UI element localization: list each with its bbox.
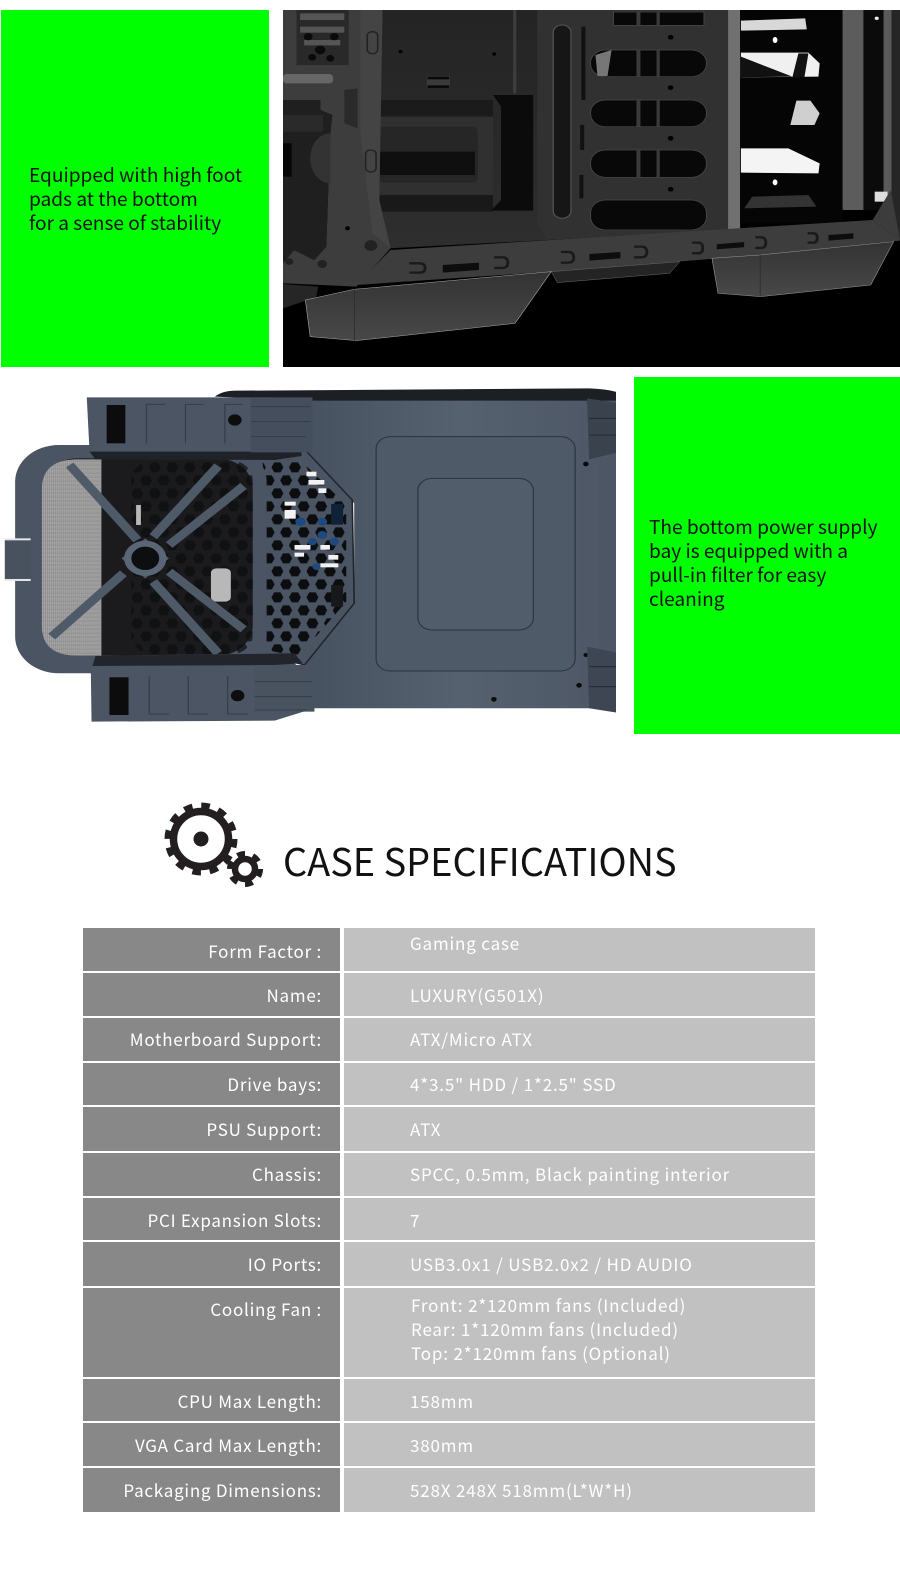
lit section on right xyxy=(728,10,740,230)
row: form factor xyxy=(83,928,815,971)
left plate and pillar xyxy=(283,10,391,287)
bottom bracket xyxy=(91,653,314,722)
row: cooling fan: Front: 2*120mm fans (Included) xyxy=(411,1292,686,1317)
row: psu support: PSU Support: xyxy=(206,1116,322,1141)
text: filter description: cleaning xyxy=(649,584,724,612)
text: foot pads description: Equipped with high foot xyxy=(29,160,242,188)
text: filter description xyxy=(649,512,878,612)
row: drive bays xyxy=(83,1063,815,1105)
panel: filter text xyxy=(634,377,900,734)
row: vga card max length: 380mm xyxy=(410,1432,474,1457)
text: filter description: bay is equipped with a xyxy=(649,536,848,564)
icon: gears xyxy=(164,802,263,887)
foot right xyxy=(712,242,894,297)
row: io ports: USB3.0x1 / USB2.0x2 / HD AUDIO xyxy=(410,1251,693,1276)
filter frame xyxy=(15,445,267,673)
text: foot pads description: pads at the bottom xyxy=(29,184,198,212)
row: io ports: IO Ports: xyxy=(248,1251,322,1276)
foot left xyxy=(305,272,551,341)
row: cooling fan xyxy=(83,1288,815,1377)
row: vga card max length xyxy=(83,1423,815,1466)
hex region xyxy=(255,445,354,665)
row: cooling fan: Rear: 1*120mm fans (Included) xyxy=(411,1316,679,1341)
drive cage xyxy=(537,10,728,240)
row: cpu max length: 158mm xyxy=(410,1388,474,1413)
row: pci expansion slots: PCI Expansion Slots: xyxy=(148,1207,322,1232)
row: chassis: SPCC, 0.5mm, Black painting interior xyxy=(410,1161,730,1186)
text: filter description: pull-in filter for easy xyxy=(649,560,826,588)
row: packaging dimensions xyxy=(83,1468,815,1512)
row: cpu max length xyxy=(83,1379,815,1421)
row: drive bays: 4*3.5" HDD / 1*2.5" SSD xyxy=(410,1071,617,1096)
row: pci expansion slots xyxy=(83,1198,815,1240)
top bracket xyxy=(87,397,312,457)
photo: power supply filter underside xyxy=(4,388,616,722)
bottom rail xyxy=(356,220,900,285)
row: name: LUXURY(G501X) xyxy=(410,982,544,1007)
row: chassis xyxy=(83,1153,815,1196)
text: foot pads description xyxy=(29,160,242,236)
row: form factor: Form Factor : xyxy=(208,938,322,963)
row: cooling fan: Cooling Fan : xyxy=(210,1296,322,1321)
table: specifications xyxy=(83,928,815,1512)
row: io ports xyxy=(83,1242,815,1286)
photo: case bottom with foot pads xyxy=(283,10,900,367)
row: psu support: ATX xyxy=(410,1116,441,1141)
row: chassis: Chassis: xyxy=(252,1161,322,1186)
panel: foot pads text xyxy=(1,10,269,367)
row: vga card max length: VGA Card Max Length: xyxy=(135,1432,322,1457)
center wall xyxy=(378,10,547,248)
panel outlines xyxy=(376,437,575,671)
row: psu support xyxy=(83,1107,815,1151)
row: cooling fan: Top: 2*120mm fans (Optional) xyxy=(411,1340,671,1365)
row: packaging dimensions: Packaging Dimensions: xyxy=(123,1477,322,1502)
right brackets xyxy=(587,398,621,459)
heading: case specifications: CASE SPECIFICATIONS xyxy=(283,832,677,887)
body plate xyxy=(298,400,621,708)
text: filter description: The bottom power supply xyxy=(649,512,878,540)
row: packaging dimensions: 528X 248X 518mm(L*W*H) xyxy=(410,1477,633,1502)
row: pci expansion slots: 7 xyxy=(410,1207,420,1232)
row: drive bays: Drive bays: xyxy=(227,1071,322,1096)
row: name xyxy=(83,973,815,1016)
row: motherboard support xyxy=(83,1018,815,1061)
row: motherboard support: Motherboard Support: xyxy=(130,1026,322,1051)
row: motherboard support: ATX/Micro ATX xyxy=(410,1026,533,1051)
row: name: Name: xyxy=(266,982,322,1007)
row: form factor: Gaming case xyxy=(410,930,520,955)
text: foot pads description: for a sense of stability xyxy=(29,208,221,236)
small left foot and middle foot xyxy=(283,284,318,308)
row: cpu max length: CPU Max Length: xyxy=(178,1388,322,1413)
